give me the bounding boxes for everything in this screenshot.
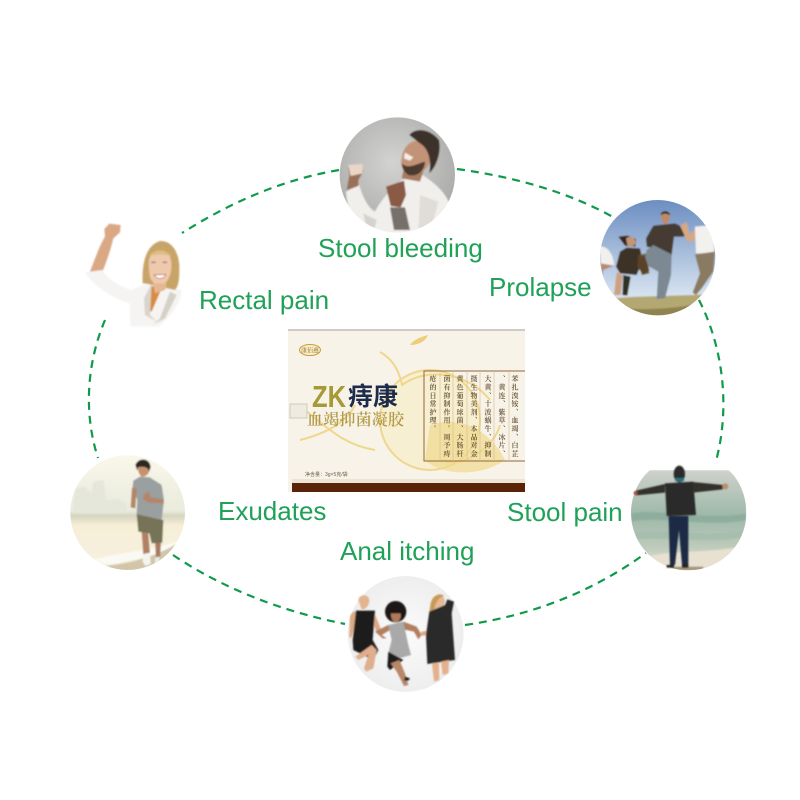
- brand name: 痔康: [348, 383, 398, 411]
- head: [138, 462, 150, 477]
- box bottom band: [292, 483, 525, 492]
- photo: friends running on grass: [597, 198, 720, 318]
- ingredient frame: [424, 371, 525, 461]
- coat: [665, 482, 696, 516]
- photo: man cheering: [340, 117, 455, 232]
- yellow floral decoration: [300, 352, 500, 470]
- ingredient frame: 菌有抑制作用。周予痔: [443, 374, 451, 458]
- product box: [288, 329, 525, 492]
- left woman: [358, 595, 369, 609]
- forearm and fist: [347, 165, 363, 190]
- right woman: [431, 595, 445, 611]
- arms: [636, 484, 665, 495]
- arm: [90, 224, 121, 272]
- photo: three women jumping: [348, 576, 464, 692]
- infographic canvas: [70, 117, 746, 692]
- arms: [131, 487, 137, 508]
- ingredient frame: 摄生物美剂、本品对金: [470, 374, 478, 458]
- head: [674, 466, 685, 482]
- ingredient frame: 、黄连、紫草、冰片、: [498, 375, 506, 458]
- jacket: [85, 270, 182, 327]
- right figure: [680, 222, 698, 242]
- ingredient frame: 大黄、十波蜗牛、抑制: [484, 374, 492, 458]
- label: exudates: Exudates: [218, 496, 326, 526]
- label: stool pain: Stool pain: [507, 497, 623, 527]
- net content: 净含量：3g×5克/袋: [305, 471, 348, 478]
- shirt: [133, 477, 164, 520]
- label: rectal pain: Rectal pain: [199, 285, 329, 315]
- label: stool bleeding: Stool bleeding: [318, 233, 483, 263]
- product name: 血竭抑菌凝胶: [307, 407, 405, 430]
- label: anal itching: Anal itching: [340, 536, 474, 566]
- ingredient frame: 疮的日常护理。: [429, 374, 437, 433]
- dashed ring connecting the symptoms: [89, 169, 723, 625]
- centre man: [661, 212, 670, 224]
- photo: man with open arms facing the sea: [630, 466, 747, 572]
- hair: [143, 241, 179, 290]
- photo: woman with raised fist: [85, 224, 182, 327]
- shorts: [137, 514, 163, 543]
- neck and head: [401, 170, 424, 182]
- second fist: [386, 181, 406, 207]
- box face: [288, 329, 525, 492]
- middle woman: [385, 601, 406, 622]
- label: prolapse: Prolapse: [489, 272, 592, 302]
- brand seal: 康佰惠: [301, 346, 320, 354]
- left figure: [599, 246, 614, 268]
- legs: [669, 516, 688, 565]
- legs: [142, 532, 150, 555]
- face: [149, 253, 171, 285]
- ingredient text columns: 苯扎溴铵、血竭、白芷: [510, 374, 519, 458]
- photo: man jogging on beach: [70, 456, 185, 570]
- shirt: [346, 173, 449, 237]
- ingredient frame: 黄色葡萄球菌、大肠杆: [456, 374, 464, 458]
- woman in dark jacket: [618, 236, 636, 247]
- side stamp: [290, 404, 307, 418]
- ZK logo: ZK: [312, 379, 347, 414]
